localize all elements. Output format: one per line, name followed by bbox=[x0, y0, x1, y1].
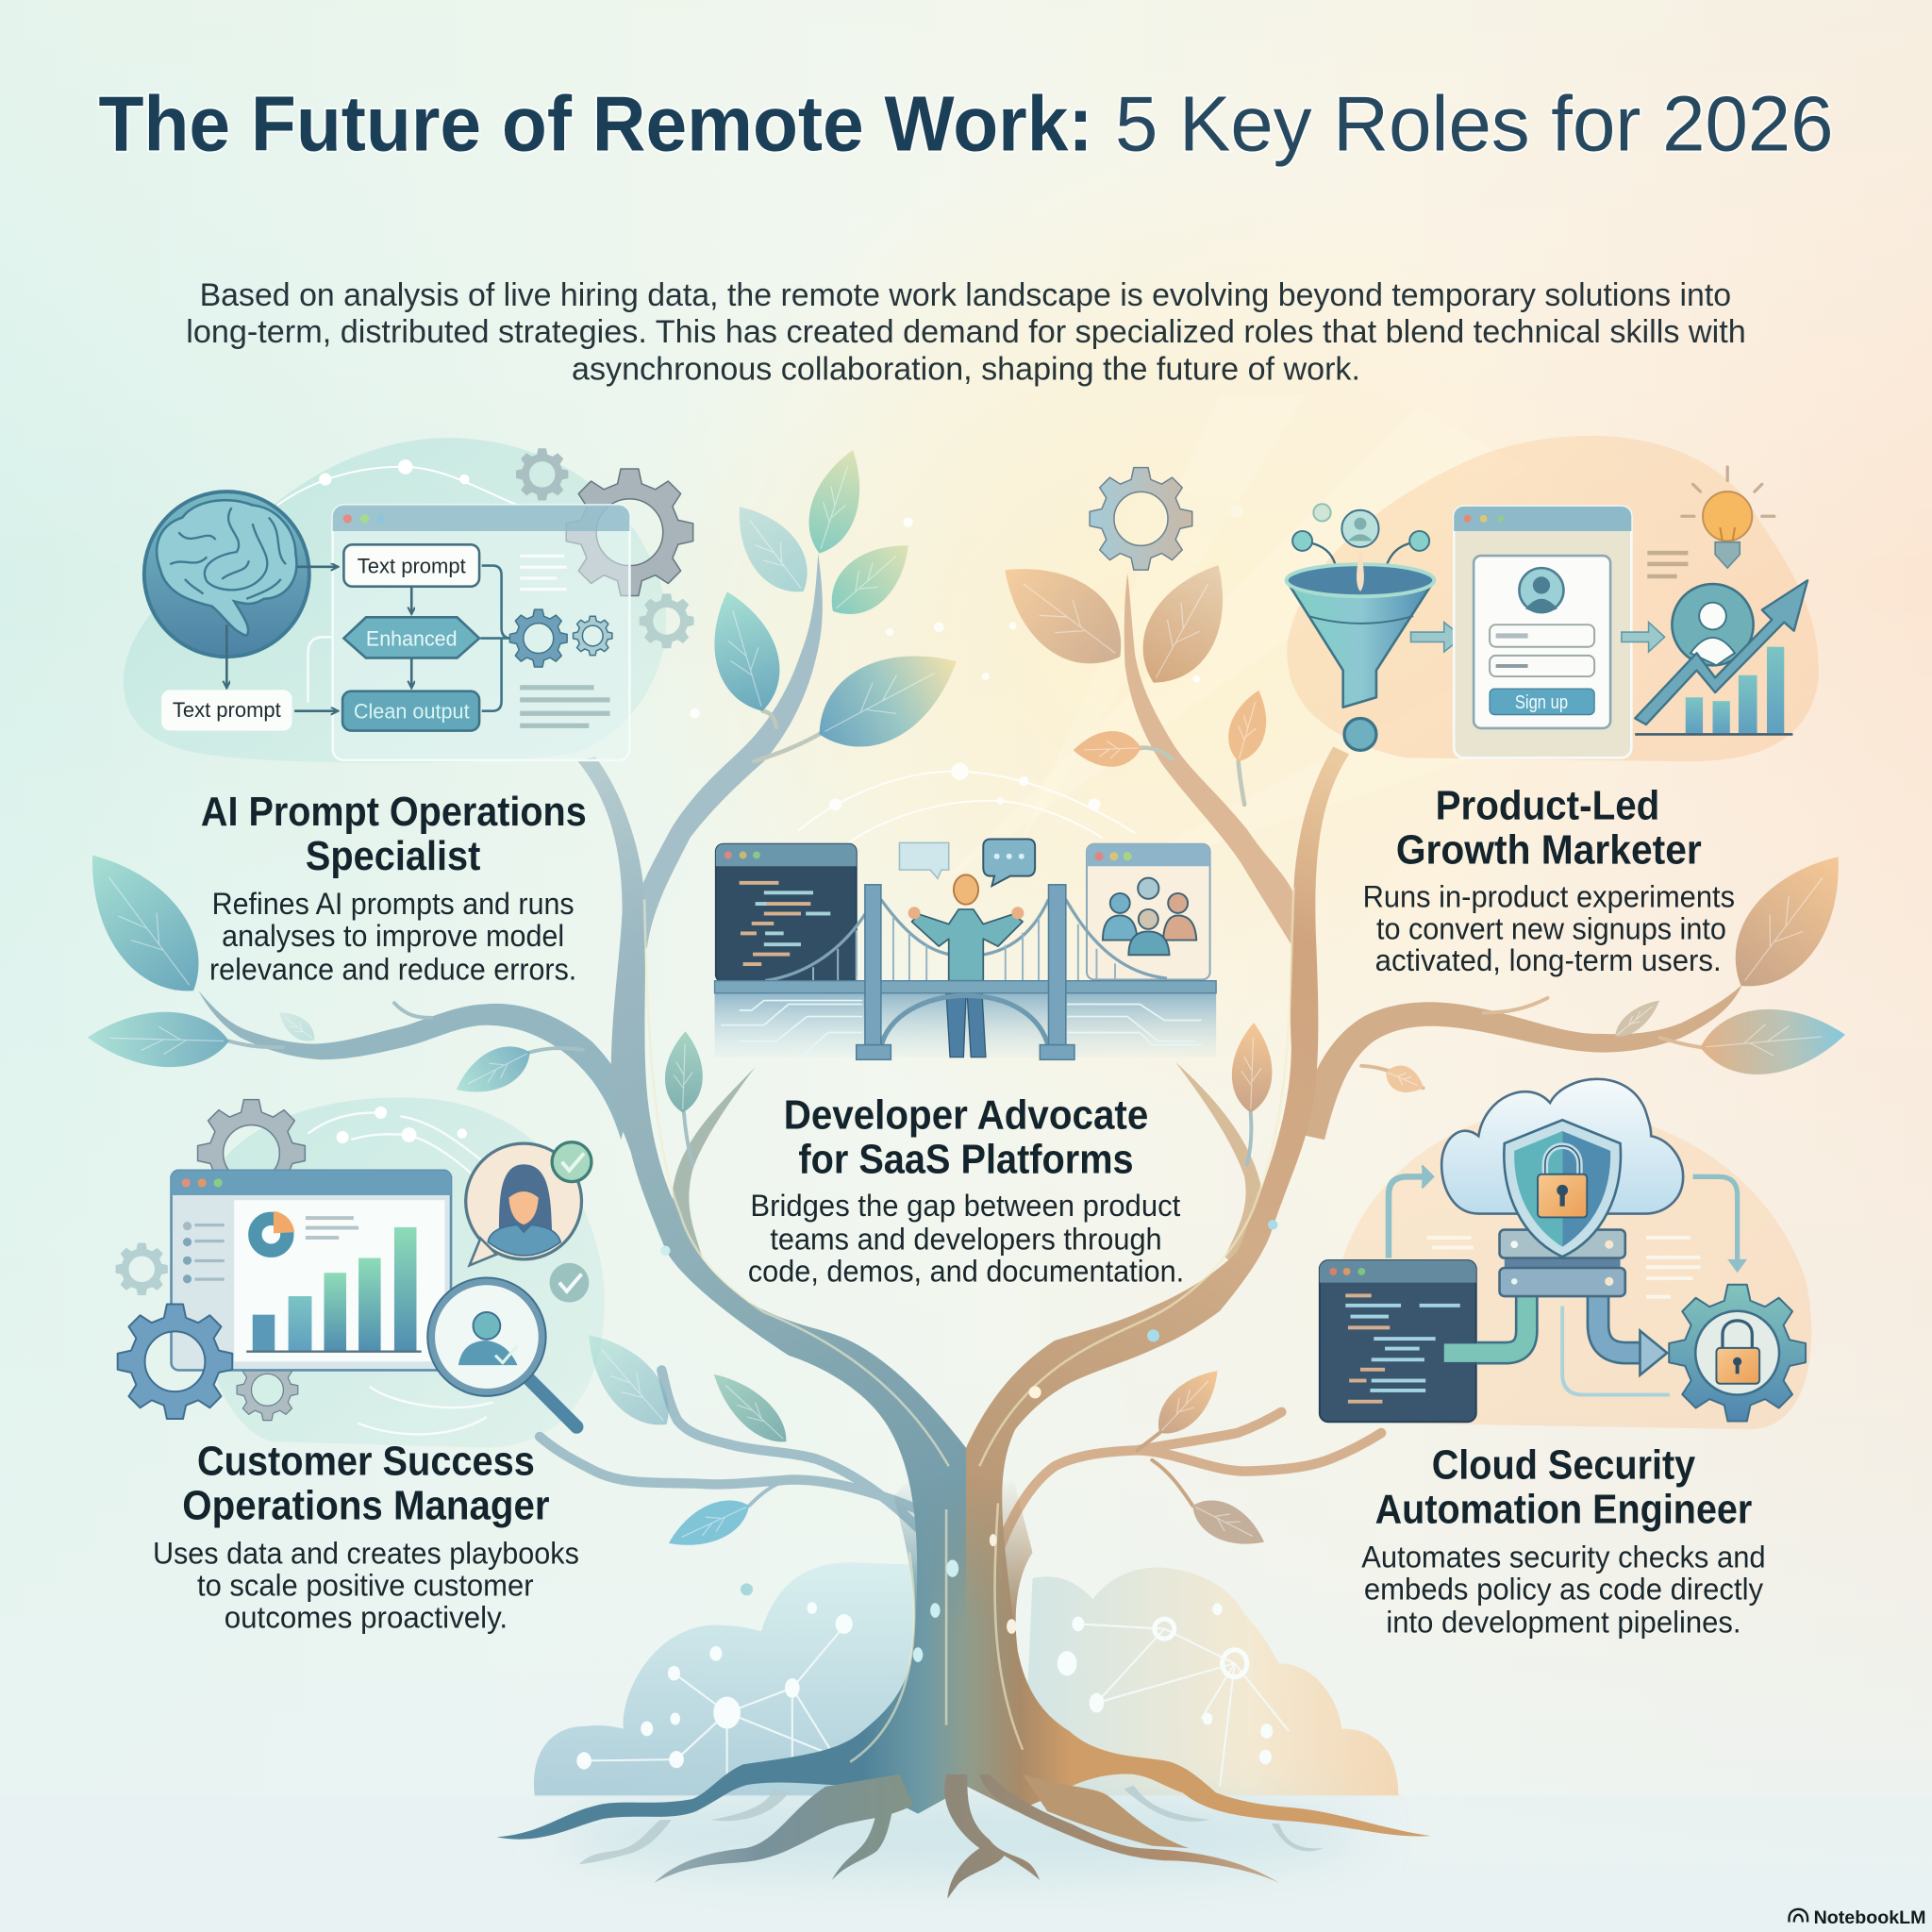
bridge hangers bbox=[813, 918, 1115, 981]
panel: AI prompt illustration bbox=[144, 449, 693, 760]
heading and text: AI prompt: Refines AI prompts and runs bbox=[212, 886, 575, 921]
shield lock bbox=[1538, 1146, 1587, 1217]
bridge towers bbox=[857, 885, 1074, 1059]
gear: top center bbox=[1090, 468, 1192, 570]
heading and text: customer success: Uses data and creates playbooks bbox=[153, 1535, 579, 1570]
heading and text: AI prompt: relevance and reduce errors. bbox=[209, 951, 576, 986]
bridge deck bbox=[715, 981, 1216, 993]
heading and text: growth: Product-Led bbox=[1436, 784, 1659, 829]
heading and text: customer success: outcomes proactively. bbox=[225, 1599, 508, 1634]
arrow head down bbox=[1727, 1259, 1747, 1273]
arrow prompt to enhanced bbox=[410, 587, 412, 613]
heading and text: customer success: Operations Manager bbox=[182, 1483, 550, 1528]
tree: center and right roots bbox=[944, 1774, 1279, 1899]
gear pale bbox=[640, 594, 693, 648]
panel: developer bridge illustration bbox=[715, 839, 1216, 1059]
tree: left side branch bbox=[198, 991, 631, 1140]
left pipe bbox=[1476, 1296, 1526, 1353]
text lines bbox=[1647, 551, 1688, 578]
gear gray top bbox=[198, 1100, 305, 1207]
left pipe inner bbox=[1444, 1296, 1526, 1353]
server rack bbox=[1500, 1230, 1625, 1296]
heading and text: cloud security: into development pipelines. bbox=[1386, 1605, 1741, 1640]
bar chart bbox=[246, 1227, 422, 1353]
box: enhanced bbox=[343, 617, 479, 658]
flow dots bbox=[337, 1107, 467, 1143]
tree: lower left branches bbox=[540, 1370, 918, 1528]
tree: strand highlights bbox=[644, 887, 1293, 1762]
heading and text: cloud security bbox=[1361, 1442, 1766, 1640]
check badge bbox=[552, 1142, 591, 1182]
box: text prompt top bbox=[343, 544, 479, 587]
bracket bbox=[480, 566, 511, 711]
gear small gray bbox=[517, 449, 568, 500]
heading and text: cloud security: Automates security checks and bbox=[1361, 1539, 1766, 1574]
arrow brain to prompt bbox=[297, 566, 338, 568]
panel blob: customer success bbox=[198, 1098, 605, 1448]
network clouds behind roots bbox=[534, 1562, 1398, 1796]
speech bubble blue bbox=[983, 839, 1035, 886]
leaf right small gray bbox=[1609, 993, 1665, 1043]
leaf right tip bbox=[1697, 1003, 1848, 1079]
gear pale left bbox=[116, 1243, 167, 1294]
heading and text: cloud security: Automation Engineer bbox=[1375, 1487, 1753, 1532]
tree: right upper branch bbox=[1124, 573, 1296, 949]
cloud bbox=[1441, 1079, 1683, 1214]
panel: cloud security illustration bbox=[1320, 1079, 1806, 1422]
dashboard window bbox=[172, 1171, 451, 1370]
intro paragraph bbox=[186, 277, 1746, 387]
sparkle dots bbox=[319, 459, 470, 486]
arrow cloud to gear bbox=[1693, 1176, 1738, 1269]
leaf center left bbox=[664, 1031, 704, 1113]
notebooklm badge: NotebookLM bbox=[1814, 1907, 1925, 1928]
box: text prompt lower: Text prompt bbox=[173, 698, 281, 722]
arrow brain down bbox=[225, 625, 227, 688]
heading and text: developer advocate bbox=[748, 1092, 1184, 1288]
heading and text: cloud security: embeds policy as code directly bbox=[1364, 1571, 1764, 1606]
signup card bbox=[1474, 556, 1610, 728]
drop arrows bbox=[1312, 543, 1409, 581]
leaf left small yellow bbox=[817, 526, 924, 630]
arrow window to chart bbox=[1622, 623, 1665, 652]
leaf left top bbox=[798, 443, 874, 560]
heading and text: customer success: Customer Success bbox=[197, 1439, 535, 1484]
tree: right side branch bbox=[1296, 985, 1742, 1140]
leaf center right bbox=[1230, 1022, 1274, 1113]
leaf lower right lower bbox=[1185, 1490, 1273, 1557]
panel: growth illustration bbox=[1287, 467, 1807, 758]
ground bbox=[0, 1794, 1932, 1932]
funnel bbox=[1287, 564, 1434, 708]
heading and text: AI prompt: Specialist bbox=[306, 834, 480, 879]
leaf left pale small bbox=[274, 1005, 320, 1047]
tree: right side twigs bbox=[1361, 998, 1718, 1088]
speech bubble pale bbox=[899, 842, 949, 878]
leaves bbox=[63, 443, 1868, 1559]
chart legend lines bbox=[306, 1216, 358, 1240]
arrow enhanced to output bbox=[410, 658, 412, 688]
light bulb bbox=[1682, 467, 1774, 568]
leaf right big bbox=[1711, 835, 1868, 1008]
leaf left mid bbox=[698, 583, 792, 720]
window dots bbox=[343, 514, 385, 523]
tree bbox=[198, 553, 1742, 1899]
tree: lower right twig bbox=[1138, 1433, 1192, 1506]
tree: left roots bbox=[655, 1774, 913, 1883]
chart baseline bbox=[1635, 733, 1792, 735]
heading and text: developer advocate: Developer Advocate bbox=[784, 1092, 1148, 1138]
gear small gray bottom bbox=[237, 1359, 298, 1421]
heading and text: growth: Growth Marketer bbox=[1396, 828, 1702, 874]
title bbox=[98, 81, 1834, 167]
heading and text: customer success bbox=[153, 1439, 579, 1634]
gear large gray bbox=[566, 469, 693, 595]
gear blue bbox=[509, 609, 567, 667]
arrow lower prompt to output bbox=[294, 710, 338, 712]
chart bars bbox=[1686, 647, 1784, 733]
code window bbox=[716, 844, 857, 982]
box: enhanced: Enhanced bbox=[366, 626, 458, 650]
heading and text: developer advocate: Bridges the gap between product bbox=[750, 1188, 1180, 1223]
growth arrow bbox=[1635, 580, 1807, 724]
leaf right small orange twig bbox=[1381, 1060, 1428, 1100]
window bbox=[333, 506, 629, 760]
tree: right root thick bbox=[1023, 1774, 1189, 1848]
dashed return line bbox=[1562, 1306, 1670, 1395]
customer bubble bbox=[466, 1143, 581, 1265]
intro paragraph: long-term, distributed strategies. This has created demand for specialized roles that blend technical skills with bbox=[186, 314, 1746, 350]
tree: back roots bbox=[579, 1786, 1324, 1864]
sparkle arc bbox=[277, 467, 518, 506]
tree: left upper branch bbox=[626, 553, 823, 949]
sparkle dots and arcs bbox=[690, 506, 1243, 850]
heading and text: growth: to convert new signups into bbox=[1376, 910, 1726, 945]
leaf lower left blue bbox=[661, 1490, 757, 1559]
right pipe inner bbox=[1598, 1296, 1649, 1353]
leaf lower right upper bbox=[1146, 1358, 1230, 1445]
tree: left limb bbox=[578, 757, 966, 1657]
tree: lower right branches bbox=[998, 1412, 1381, 1553]
title: 5 Key Roles for 2026 bbox=[1115, 81, 1834, 167]
tree: left inner thin branch bbox=[673, 1067, 756, 1269]
bridge arch bbox=[881, 995, 1049, 1047]
signup window bbox=[1454, 507, 1631, 758]
brain bbox=[157, 500, 296, 636]
light data lines bbox=[1426, 1236, 1700, 1299]
box: clean output bbox=[342, 691, 479, 731]
signup card: Sign up bbox=[1515, 692, 1568, 713]
leaf right upper tan bbox=[1124, 549, 1248, 699]
panel blob: AI prompt bbox=[124, 438, 666, 763]
title: The Future of Remote Work: bbox=[98, 81, 1093, 167]
tree: glowing nodes bbox=[660, 1220, 1277, 1662]
right pipe arrow head bbox=[1640, 1331, 1667, 1375]
gear blue clock bbox=[118, 1304, 232, 1419]
tree: lower left twig bbox=[749, 1480, 789, 1506]
funnel top drop bbox=[1357, 548, 1364, 591]
tree: trunk and main roots bbox=[496, 1448, 1430, 1840]
heading and text: AI prompt: AI Prompt Operations bbox=[201, 790, 587, 835]
leaf left tip bbox=[87, 1010, 230, 1069]
tree: upper twigs bbox=[754, 711, 1244, 805]
gear with lock bbox=[1669, 1285, 1806, 1422]
leaf lower left pale bbox=[570, 1319, 686, 1441]
check badge pale bbox=[550, 1263, 589, 1303]
heading and text: developer advocate: teams and developers through bbox=[770, 1221, 1162, 1256]
shield bbox=[1504, 1120, 1621, 1257]
arrow funnel to window bbox=[1411, 623, 1462, 652]
window text lines light bbox=[520, 555, 567, 591]
donut chart bbox=[255, 1211, 294, 1251]
leaf right upper bbox=[982, 541, 1142, 687]
leaf left upper pale bbox=[720, 491, 824, 607]
magnifier bbox=[427, 1277, 576, 1426]
team window bbox=[1087, 844, 1210, 979]
tree: right inner thin branch bbox=[1175, 1062, 1262, 1269]
window text lines gray bbox=[520, 685, 610, 728]
funnel output ball bbox=[1344, 718, 1376, 750]
heading and text: growth: activated, long-term users. bbox=[1375, 942, 1722, 977]
leaf left big bbox=[63, 833, 224, 1013]
right pipe bbox=[1598, 1296, 1649, 1353]
pale connector bbox=[308, 637, 333, 702]
heading and text: developer advocate: for SaaS Platforms bbox=[798, 1137, 1134, 1182]
gear small blue bbox=[574, 616, 612, 656]
intro paragraph: asynchronous collaboration, shaping the future of work. bbox=[572, 351, 1360, 387]
box: text prompt top: Text prompt bbox=[358, 554, 466, 577]
panel: customer success illustration bbox=[116, 1100, 591, 1434]
arrow code to cloud bbox=[1389, 1176, 1429, 1258]
heading and text: growth: Runs in-product experiments bbox=[1363, 878, 1735, 913]
panel blob: growth bbox=[1287, 436, 1819, 761]
heading and text: customer success: to scale positive customer bbox=[197, 1567, 534, 1602]
intro paragraph: Based on analysis of live hiring data, the remote work landscape is evolving beyond temporary solutions into bbox=[200, 277, 1731, 313]
heading and text: AI prompt bbox=[201, 790, 587, 986]
bridge cables bbox=[765, 899, 1167, 981]
heading and text: developer advocate: code, demos, and documentation. bbox=[748, 1253, 1184, 1288]
panel blob: cloud security bbox=[1336, 1109, 1811, 1429]
under deck circuit panel bbox=[715, 993, 1216, 1058]
activated user avatar bbox=[1672, 584, 1754, 665]
box: clean output: Clean output bbox=[354, 699, 470, 723]
leaf left big yellow bbox=[801, 627, 974, 769]
box: text prompt lower bbox=[161, 690, 292, 731]
code window bbox=[1320, 1260, 1476, 1422]
leaf right small orange bbox=[1073, 730, 1141, 768]
window header bbox=[333, 506, 629, 531]
heading and text: cloud security: Cloud Security bbox=[1432, 1442, 1695, 1488]
person bbox=[908, 874, 1024, 1058]
tree: side twigs bbox=[229, 1003, 1251, 1164]
brain medallion bbox=[144, 491, 309, 657]
heading and text: AI prompt: analyses to improve model bbox=[222, 918, 564, 953]
user circles above funnel bbox=[1292, 504, 1429, 551]
leaf lower left green bbox=[703, 1362, 797, 1454]
arrow head up bbox=[1422, 1166, 1433, 1188]
heading and text: growth bbox=[1363, 784, 1735, 977]
leaf right orange upright bbox=[1222, 686, 1275, 766]
leaf left branch small bbox=[448, 1036, 539, 1107]
tree: right limb bbox=[966, 747, 1349, 1657]
flow arcs bbox=[308, 1112, 492, 1434]
